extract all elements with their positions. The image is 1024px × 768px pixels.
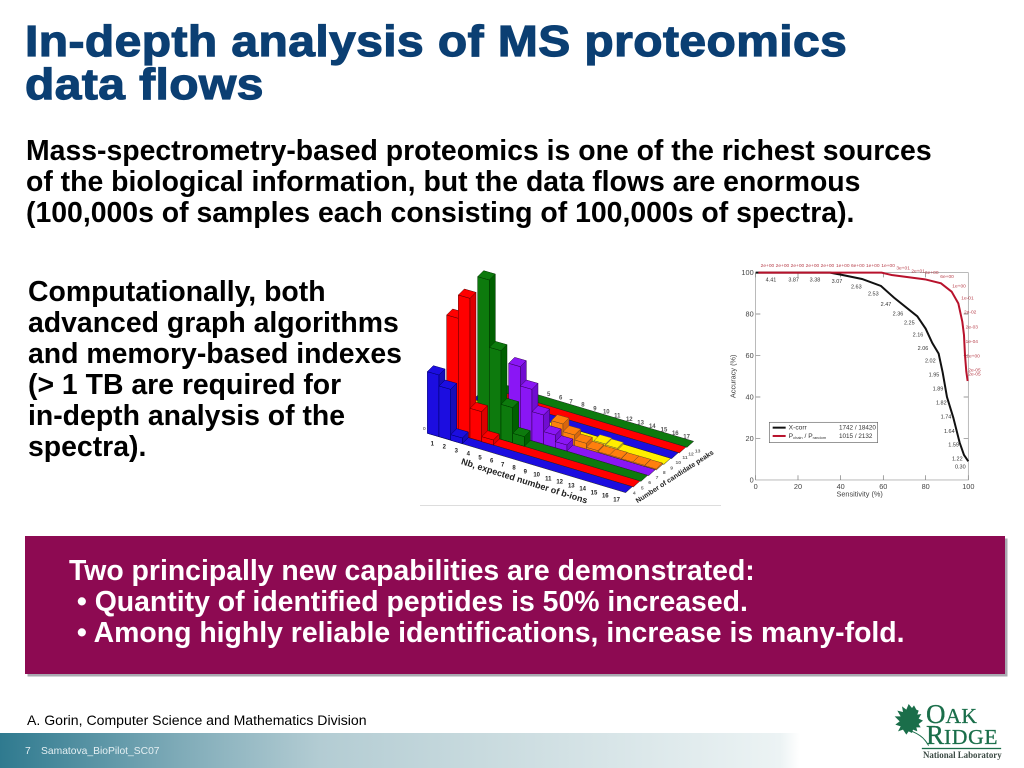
y axis title: Number of candidate peaks	[635, 449, 715, 505]
black point labels: 1.64	[944, 429, 955, 435]
tick labels: 100	[741, 268, 754, 277]
left text block: spectra).	[28, 430, 146, 462]
black point labels: 1.22	[952, 457, 963, 463]
legend: P	[789, 433, 793, 440]
callout text: • Quantity of identified peptides is 50% increased.	[77, 586, 748, 618]
icon: oak leaf	[895, 704, 928, 745]
red point labels: 2e+00	[821, 263, 835, 269]
legend: X-corr	[789, 425, 808, 432]
title: data flows	[25, 60, 264, 109]
tick labels: 0	[754, 482, 758, 491]
back axis numbers: 17	[683, 434, 691, 440]
tick labels: 60	[746, 351, 754, 360]
x axis numbers: 2	[443, 445, 447, 451]
x axis numbers: 7	[501, 462, 505, 468]
intro text: (100,000s of samples each consisting of 100,000s of spectra).	[26, 197, 854, 229]
curve: Pchain / Prandom	[758, 273, 968, 381]
yellow bars	[594, 435, 623, 450]
slide number and deck name: 7 Samatova_BioPilot_SC07	[25, 746, 160, 757]
back axis numbers	[547, 392, 691, 440]
right axis numbers: 9	[670, 465, 673, 471]
black point labels: 2.06	[918, 346, 928, 352]
legend: 1742 / 18420	[839, 425, 876, 432]
right axis numbers: 12	[688, 452, 694, 458]
callout text: Two principally new capabilities are demonstrated:	[69, 555, 755, 587]
title	[25, 17, 847, 109]
black point labels: 3.87	[788, 277, 799, 283]
axis ticks	[756, 273, 968, 480]
blue bars	[427, 366, 468, 444]
back axis numbers: 10	[603, 410, 610, 416]
x axis numbers: 3	[455, 448, 459, 454]
purple bars	[509, 357, 573, 451]
x axis numbers: 9	[524, 469, 528, 475]
logo wordmark: OAK	[926, 699, 977, 729]
red point labels: 2e+00	[776, 263, 790, 269]
tick labels: 20	[794, 482, 802, 491]
intro text: Mass-spectrometry-based proteomics is one of the richest sources	[26, 135, 932, 167]
red point labels: 6e+00	[851, 263, 865, 269]
legend: / P	[803, 433, 813, 440]
right axis numbers: 4	[633, 490, 636, 496]
tick labels: 0	[750, 476, 754, 485]
x axis title: Nb, expected number of b-ions	[460, 456, 589, 506]
legend	[769, 422, 878, 443]
right axis numbers	[633, 448, 701, 496]
red point labels: 2e-05	[968, 368, 981, 374]
red point labels: 2e+00	[806, 263, 820, 269]
tick labels	[741, 268, 974, 491]
right axis numbers: 7	[656, 475, 659, 481]
callout panel	[25, 536, 1005, 674]
logo wordmark: RIDGE	[926, 720, 998, 750]
black point labels: 4.41	[766, 277, 776, 283]
left text block: advanced graph algorithms	[28, 306, 399, 338]
red point labels: 2e+00	[761, 263, 775, 269]
footer band	[0, 733, 1024, 768]
black point labels: 2.25	[904, 320, 915, 326]
left text block: Computationally, both	[28, 276, 326, 308]
back axis numbers: 8	[581, 403, 585, 409]
right axis numbers: 13	[695, 448, 701, 454]
image baseline rule	[420, 504, 721, 506]
tick labels: 20	[746, 434, 754, 443]
red point labels: 2e-03	[966, 324, 978, 330]
right axis numbers: 6	[648, 480, 651, 486]
curve: x-corr	[756, 273, 968, 461]
back axis numbers: 7	[569, 399, 573, 405]
x axis numbers: 14	[579, 487, 587, 493]
red point labels	[761, 263, 981, 377]
right axis numbers: 5	[641, 485, 644, 491]
x axis numbers: 17	[613, 497, 621, 503]
red point labels: 2e+00	[966, 353, 980, 359]
right axis numbers: 11	[682, 455, 688, 461]
black point labels: 1.95	[929, 373, 939, 379]
tick labels: 100	[962, 482, 974, 491]
x axis numbers: 13	[568, 483, 575, 489]
back axis numbers: 12	[626, 417, 633, 423]
logo: Oak Ridge National Laboratory: National Laboratory	[923, 750, 1002, 760]
bar chart axis labels	[423, 392, 715, 506]
tick labels: 40	[746, 393, 754, 402]
black point labels: 1.82	[936, 401, 947, 407]
red point labels: 1e+00	[881, 263, 895, 269]
x axis numbers: 15	[591, 490, 598, 496]
back axis numbers: 11	[614, 413, 621, 419]
x axis numbers: 1	[431, 441, 435, 447]
legend: random	[813, 435, 827, 440]
x axis numbers	[431, 441, 621, 503]
accuracy line chart: Accuracy (%)	[729, 355, 738, 398]
x axis numbers: 16	[602, 494, 609, 500]
axis titles: Sensitivity (%)	[836, 490, 883, 499]
black point labels: 2.63	[851, 284, 862, 290]
black point labels: 2.53	[868, 292, 879, 298]
left text block: in-depth analysis of the	[28, 400, 345, 432]
x axis numbers: 6	[490, 459, 494, 465]
red point labels: 6e+00	[925, 270, 939, 276]
x axis numbers: 10	[533, 473, 541, 479]
black point labels: 1.59	[948, 443, 959, 449]
left text block: and memory-based indexes	[28, 338, 402, 370]
red point labels: 1e+00	[952, 283, 966, 289]
legend: 1015 / 2132	[839, 433, 873, 440]
logo wordmark	[922, 699, 1001, 750]
back axis numbers: 5	[547, 392, 551, 398]
back axis numbers: 9	[593, 406, 597, 412]
red point labels: 1e-01	[961, 296, 974, 302]
black point labels: 2.36	[893, 311, 903, 317]
red point labels: 1e+00	[836, 263, 850, 269]
tick labels: 60	[879, 482, 887, 491]
red point labels: 6e+00	[940, 274, 954, 280]
callout text	[69, 555, 905, 649]
left text block: (> 1 TB are required for	[28, 368, 341, 400]
floor strips	[427, 382, 694, 493]
author credit: A. Gorin, Computer Science and Mathematics Division	[27, 712, 367, 728]
x axis numbers: 12	[556, 480, 564, 486]
callout text: • Among highly reliable identifications, increase is many-fold.	[77, 617, 905, 649]
back axis numbers: 16	[672, 431, 679, 437]
red point labels: 3e+01	[896, 266, 910, 272]
black point labels: 3.38	[810, 277, 820, 283]
red point labels: 2e-05	[968, 371, 981, 377]
black point labels: 3.07	[832, 279, 842, 285]
back axis numbers: 14	[649, 424, 656, 430]
legend: chain	[793, 435, 803, 440]
back axis numbers: 6	[559, 396, 563, 402]
left text block	[28, 276, 402, 462]
right axis numbers: 10	[676, 460, 681, 466]
x axis numbers: 8	[512, 466, 516, 472]
black point labels: 2.47	[881, 302, 891, 308]
title: In-depth analysis of MS proteomics	[25, 17, 847, 66]
black point labels: 1.89	[933, 387, 943, 393]
right axis numbers: 8	[663, 470, 666, 476]
black point labels: 2.02	[925, 358, 936, 364]
intro text: of the biological information, but the data flows are enormous	[26, 166, 860, 198]
bar chart axis labels: 0	[423, 426, 426, 431]
tick labels: 80	[922, 482, 930, 491]
back axis numbers: 13	[637, 420, 645, 426]
x axis numbers: 11	[545, 476, 552, 482]
red point labels: 2e+01	[911, 268, 925, 274]
x axis numbers: 4	[467, 452, 471, 458]
black point labels	[766, 277, 966, 470]
black point labels: 2.16	[913, 332, 923, 338]
black point labels: 0.30	[955, 464, 966, 470]
accuracy line chart	[729, 263, 981, 499]
red point labels: 2e-02	[964, 310, 977, 316]
orange bars	[551, 415, 662, 469]
tick labels: 40	[837, 482, 845, 491]
intro text	[26, 135, 932, 229]
back axis numbers: 15	[661, 428, 668, 434]
tick labels: 80	[746, 310, 754, 319]
red bars	[447, 289, 499, 445]
red point labels: 2e+00	[791, 263, 805, 269]
red point labels: 1e-04	[966, 339, 978, 345]
x axis numbers: 5	[478, 455, 482, 461]
black point labels: 1.74	[941, 414, 951, 420]
green bars	[478, 271, 530, 446]
red point labels: 1e+00	[866, 263, 880, 269]
